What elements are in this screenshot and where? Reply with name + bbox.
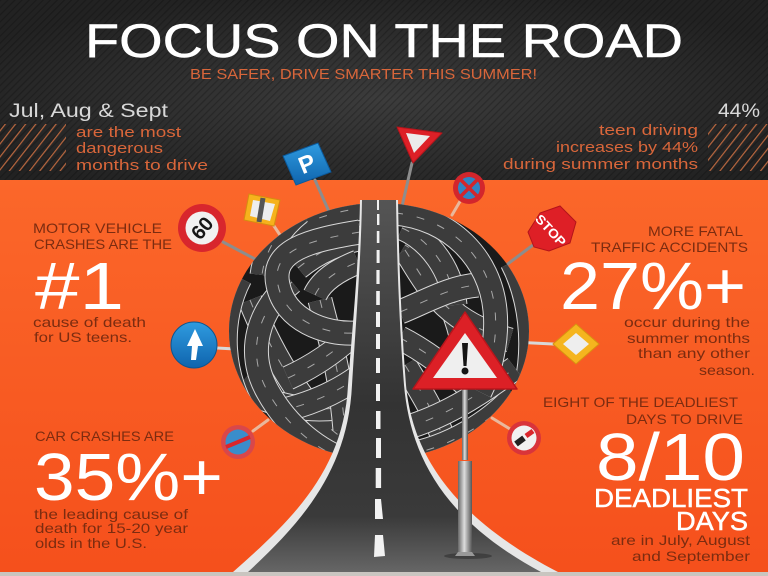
stat: 27 percent [560, 223, 755, 378]
stat: 8 of 10 deadliest days: DEADLIEST [594, 483, 748, 513]
sign poles [217, 163, 553, 431]
left header stat [0, 101, 208, 174]
sign: no parking [453, 172, 485, 204]
subtitle: BE SAFER, DRIVE SMARTER THIS SUMMER! [190, 66, 537, 83]
left header stat: dangerous [76, 140, 163, 157]
warning sign post [444, 388, 492, 559]
stat: 27 percent: TRAFFIC ACCIDENTS [591, 239, 748, 255]
bottom strip [0, 572, 768, 576]
sign: no waiting [221, 425, 255, 459]
stat: 27 percent: MORE FATAL [648, 223, 743, 239]
stat: 8 of 10 deadliest days [543, 394, 750, 564]
stat: 27 percent: than any other [638, 345, 750, 361]
ball of roads [225, 203, 531, 462]
stat: number one cause: cause of death [33, 314, 146, 330]
stat: 35 percent: 35%+ [34, 440, 223, 515]
sign: speed limit 60: 60 [187, 213, 218, 244]
right header stat: 44% [718, 101, 760, 122]
sign: no overtaking [507, 421, 541, 455]
stat: 27 percent: season. [699, 362, 755, 378]
warning triangle sign [413, 312, 517, 389]
stat: number one cause: #1 [35, 249, 124, 324]
sign: priority diamond [553, 324, 599, 364]
title: FOCUS ON THE ROAD [85, 14, 683, 67]
stat: 8 of 10 deadliest days: DAYS TO DRIVE [626, 411, 743, 427]
stat: number one cause: MOTOR VEHICLE [33, 220, 162, 236]
sign: yellow narrow bridge [244, 194, 280, 226]
orange background panel [0, 180, 768, 572]
stat: 35 percent: CAR CRASHES ARE [35, 428, 174, 444]
stat: number one cause: for US teens. [34, 329, 132, 345]
stat: 27 percent: occur during the [624, 314, 750, 330]
stat: 35 percent: olds in the U.S. [35, 535, 147, 551]
left header stat: are the most [76, 124, 182, 141]
left header stat: months to drive [76, 157, 208, 174]
right header stat: increases by 44% [556, 139, 698, 156]
stat: 27 percent: summer months [627, 330, 750, 346]
right header stat: during summer months [503, 156, 698, 173]
stat: 8 of 10 deadliest days: are in July, August [611, 532, 750, 548]
right header stat: teen driving [599, 122, 698, 139]
stat: number one cause: CRASHES ARE THE [34, 236, 172, 252]
sign: yield triangle [397, 127, 442, 163]
stat: 8 of 10 deadliest days: 8/10 [596, 420, 745, 495]
sign: P parking: P [295, 149, 320, 180]
stat: 8 of 10 deadliest days: and September [632, 548, 750, 564]
front layer bands [256, 282, 350, 462]
left header stat: Jul, Aug & Sept [9, 101, 169, 122]
stat: 8 of 10 deadliest days: EIGHT OF THE DEADLIEST [543, 394, 738, 410]
main road [233, 200, 558, 572]
back layer bands [241, 295, 312, 424]
stat: 8 of 10 deadliest days: DAYS [676, 506, 748, 536]
sign: P parking [283, 143, 331, 185]
stat: number one cause [33, 220, 172, 345]
stat: 35 percent: death for 15-20 year [35, 520, 188, 536]
sign: stop [528, 206, 576, 251]
stat: 35 percent: the leading cause of [34, 506, 188, 522]
sign: up arrow [171, 322, 217, 368]
stat: 27 percent: 27%+ [560, 249, 746, 324]
right header stat [503, 101, 768, 173]
sign: stop: STOP [532, 211, 569, 250]
road centre dashes [374, 200, 385, 557]
stat: 35 percent [34, 428, 223, 551]
sign: speed limit 60 [178, 204, 226, 252]
header panel [0, 0, 768, 180]
